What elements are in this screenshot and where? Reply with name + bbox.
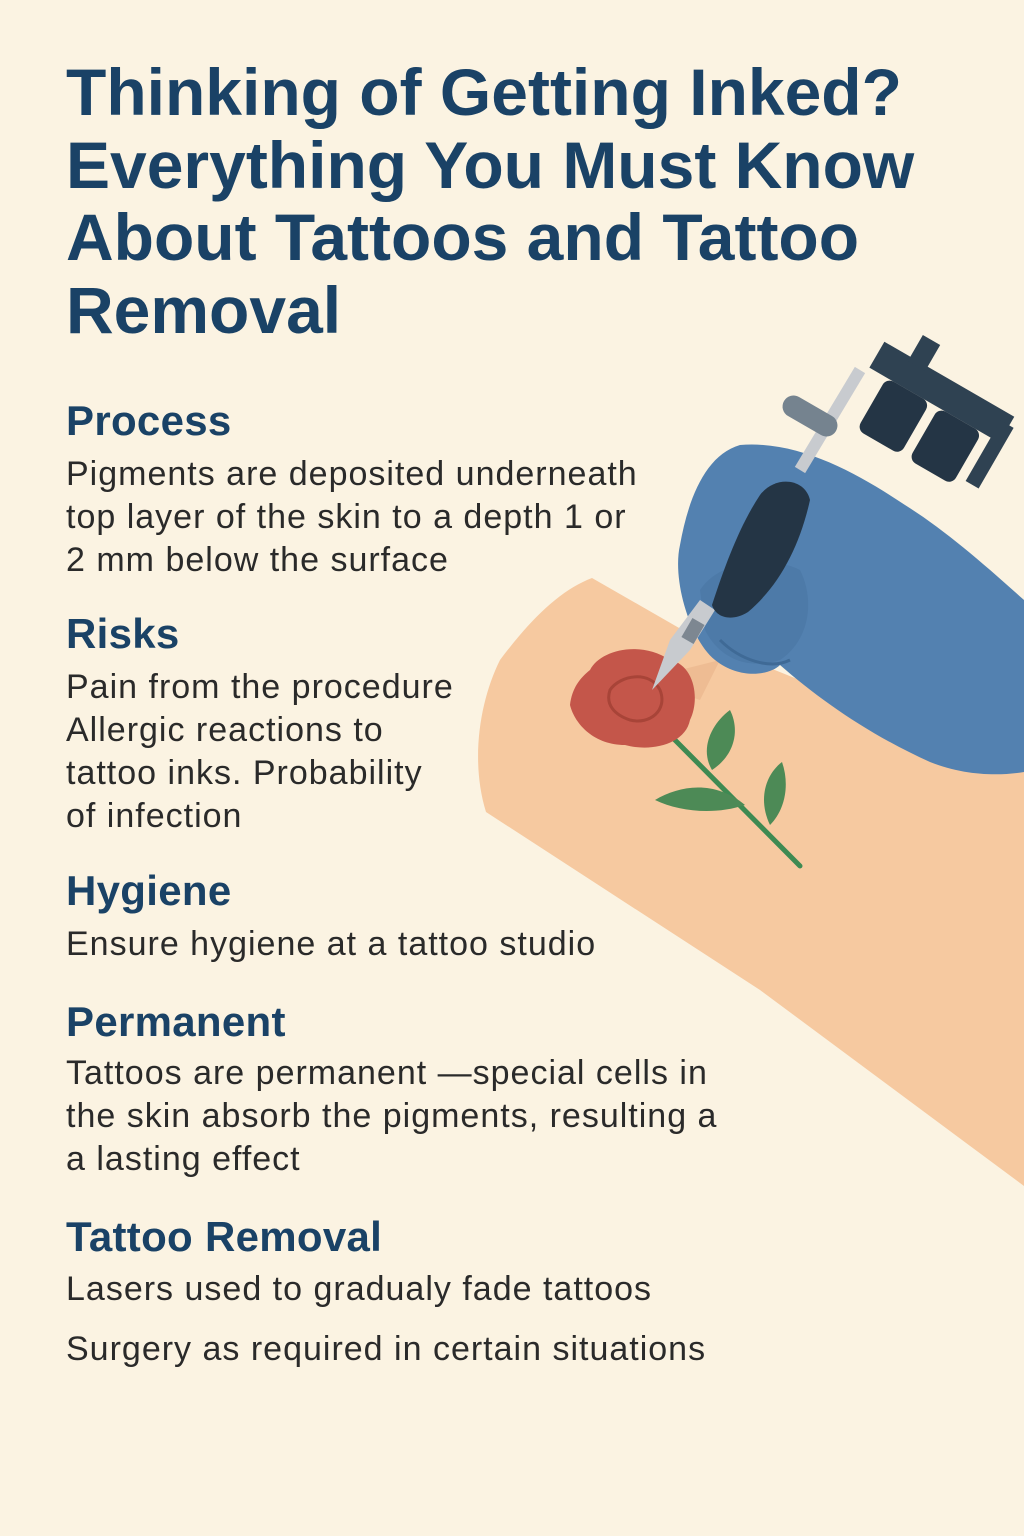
text: risks body [66, 668, 454, 835]
tattoo machine [652, 320, 1024, 690]
title: Thinking of Getting Inked? [66, 55, 902, 129]
text: permanent body: the skin absorb the pigments, resulting a [66, 1097, 717, 1135]
text: permanent body: a lasting effect [66, 1140, 301, 1178]
title [66, 55, 914, 346]
text: process body: Pigments are deposited underneath [66, 455, 638, 493]
gloved hand [678, 445, 1024, 774]
text: permanent body [66, 1054, 717, 1178]
arm [478, 578, 1024, 1186]
rose tattoo [570, 649, 800, 866]
heading: tattoo removal: Tattoo Removal [66, 1213, 382, 1260]
text: hygiene body: Ensure hygiene at a tattoo studio [66, 925, 596, 963]
text: risks body: Allergic reactions to [66, 711, 384, 749]
heading: permanent: Permanent [66, 998, 286, 1045]
title: Removal [66, 272, 341, 346]
text: risks body: tattoo inks. Probability [66, 754, 423, 792]
text: risks body: of infection [66, 797, 242, 835]
text: process body: 2 mm below the surface [66, 541, 449, 579]
text: removal laser: Lasers used to gradualy fade tattoos [66, 1270, 652, 1308]
title: Everything You Must Know [66, 128, 914, 202]
text: permanent body: Tattoos are permanent —special cells in [66, 1054, 708, 1092]
heading: hygiene: Hygiene [66, 867, 232, 914]
text: risks body: Pain from the procedure [66, 668, 454, 706]
title: About Tattoos and Tattoo [66, 200, 859, 274]
text: process body: top layer of the skin to a depth 1 or [66, 498, 627, 536]
text: removal surgery: Surgery as required in certain situations [66, 1330, 706, 1368]
heading: process: Process [66, 397, 232, 444]
heading: risks: Risks [66, 610, 180, 657]
text: process body [66, 455, 638, 579]
